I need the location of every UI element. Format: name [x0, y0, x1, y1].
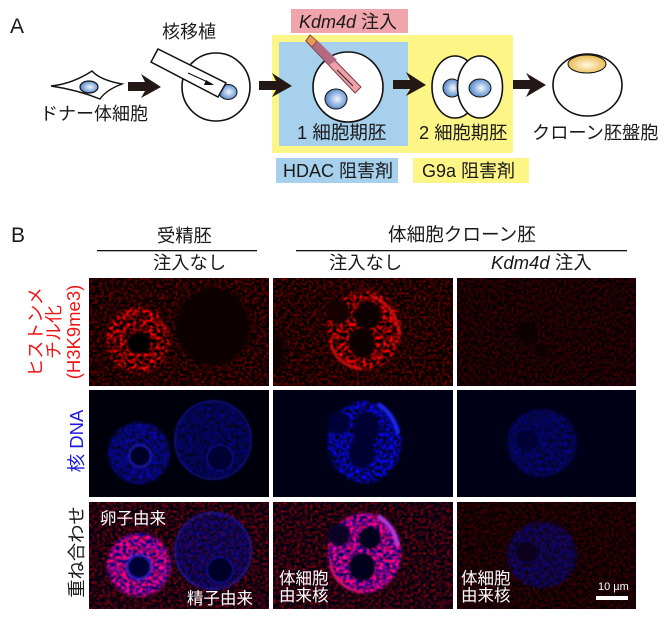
row label: histone methylation: (H3K9me3)	[63, 285, 84, 379]
caption: egg-derived: 卵子由来	[100, 509, 166, 528]
icon: donor cell	[51, 71, 122, 99]
column header: somatic clone embryo: 注入なし	[329, 252, 402, 273]
row label: histone methylation: チル化	[44, 305, 64, 359]
caption: sperm-derived: 精子由来	[187, 589, 253, 608]
Kdm4d injection label: Kdm4d 注入	[299, 12, 397, 32]
row label: histone methylation: ヒストンメ	[26, 287, 46, 377]
caption: somatic-derived nucleus: 体細胞	[461, 569, 510, 588]
column header: fertilized embryo: 注入なし	[153, 252, 226, 273]
scale bar	[596, 581, 629, 600]
two-cell embryo label: 2 細胞期胚	[419, 122, 507, 143]
arrow 2	[259, 73, 292, 97]
arrow 1	[128, 74, 161, 98]
scale bar: 10 µm	[598, 581, 629, 593]
micrograph: clone no injection, DNA	[273, 390, 453, 497]
one-cell embryo label: 1 細胞期胚	[297, 122, 386, 143]
G9a inhibitor label: G9a 阻害剤	[422, 161, 515, 181]
column header: somatic clone embryo: Kdm4d 注入	[491, 252, 592, 273]
micrograph: clone Kdm4d, H3K9me3	[457, 278, 636, 386]
caption: somatic-derived nucleus: 由来核	[461, 586, 510, 605]
arrow 3	[393, 72, 426, 96]
icon: oocyte with transfer pipette	[151, 49, 250, 121]
micrograph: clone no injection, merge	[273, 502, 453, 609]
micrograph: clone Kdm4d, DNA	[457, 390, 636, 497]
micrograph: fertilized, merge	[89, 502, 269, 609]
row label: histone methylation	[26, 285, 84, 379]
panel: cloning workflow	[40, 9, 658, 183]
icon: cloned blastocyst	[553, 54, 622, 116]
caption: somatic-derived nucleus: 由来核	[279, 586, 328, 605]
column header: fertilized embryo: 受精胚	[157, 225, 212, 246]
HDAC inhibitor label: HDAC 阻害剤	[283, 161, 393, 181]
panel label B: B	[11, 224, 25, 247]
micrograph: clone no injection, H3K9me3	[269, 278, 453, 386]
icon: two-cell embryo	[432, 56, 502, 118]
yellow background: G9a inhibitor period	[272, 35, 513, 153]
blue background: HDAC inhibitor period	[279, 42, 408, 146]
panel label A: A	[10, 15, 24, 38]
row label: merge: 重ね合わせ	[66, 506, 87, 598]
micrograph: clone Kdm4d, merge	[457, 502, 636, 609]
G9a inhibitor label	[413, 158, 529, 183]
micrograph: fertilized, DNA	[89, 390, 269, 497]
Kdm4d injection label	[291, 9, 408, 33]
row label: nuclear DNA: 核 DNA	[66, 409, 87, 472]
nuclear transfer label: 核移植	[162, 21, 216, 42]
blastocyst label: クローン胚盤胞	[532, 123, 658, 143]
icon: one-cell embryo with injection needle	[306, 35, 383, 122]
column header: somatic clone embryo: 体細胞クローン胚	[388, 224, 536, 245]
donor cell label: ドナー体細胞	[40, 104, 148, 124]
arrow 4	[513, 73, 546, 97]
caption: somatic-derived nucleus: 体細胞	[279, 569, 328, 588]
column header: somatic clone embryo	[296, 224, 627, 273]
micrograph: fertilized, H3K9me3	[89, 278, 269, 386]
column header: fertilized embryo	[97, 225, 257, 273]
